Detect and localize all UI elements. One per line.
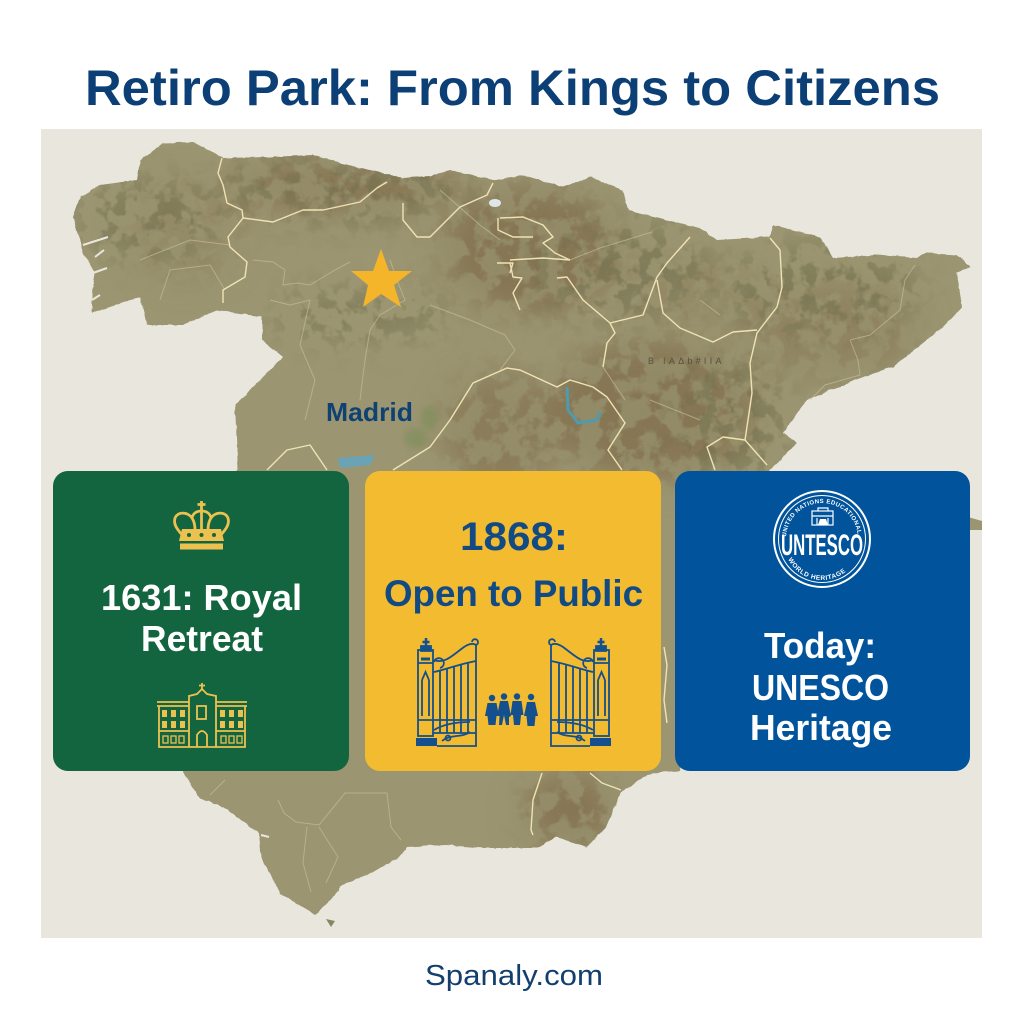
map: Spain landmass: [41, 129, 982, 938]
heading: Today: Today:: [764, 625, 876, 666]
icon: palace: [157, 683, 247, 747]
icon: left gate: [416, 638, 478, 746]
heading: 1868: 1868:: [460, 515, 568, 559]
heading: 1631 Royal: 1631: Royal: [101, 577, 302, 618]
panel: 1631 royal retreat: [53, 471, 349, 771]
heading: Retreat: Retreat: [141, 618, 263, 659]
footer: source: Spanaly.com: [425, 960, 603, 992]
icon: right gate: [549, 638, 611, 746]
icon: UNESCO seal: WORLD HERITAGE: [788, 556, 846, 580]
label: Madrid: Madrid: [326, 397, 413, 427]
heading: Open to Public: Open to Public: [384, 573, 643, 614]
icon: UNESCO seal: [773, 490, 871, 588]
panel: 1868 open to public: [365, 471, 661, 771]
panel: map background: [41, 129, 982, 938]
icon: UNESCO seal: UNTESCO: [781, 529, 863, 562]
title: Retiro Park: From Kings to Citizens: [85, 60, 940, 116]
heading: UNESCO: UNESCO: [752, 667, 889, 708]
heading: Heritage: Heritage: [750, 707, 892, 748]
panel: today UNESCO heritage: [675, 471, 970, 771]
map: regional soft borders: [140, 190, 915, 892]
map: rivers and lakes: [338, 199, 600, 468]
icon: UNESCO seal: UNITED NATIONS EDUCATIONAL: [782, 498, 862, 536]
map: main cream borders: [218, 158, 782, 835]
icon: people walking through: [485, 693, 538, 726]
green patches: [405, 406, 437, 448]
label: faint region text: B IAΔb#IIA: [648, 356, 723, 366]
star marker: [351, 249, 412, 307]
icon: crown: [175, 501, 228, 550]
